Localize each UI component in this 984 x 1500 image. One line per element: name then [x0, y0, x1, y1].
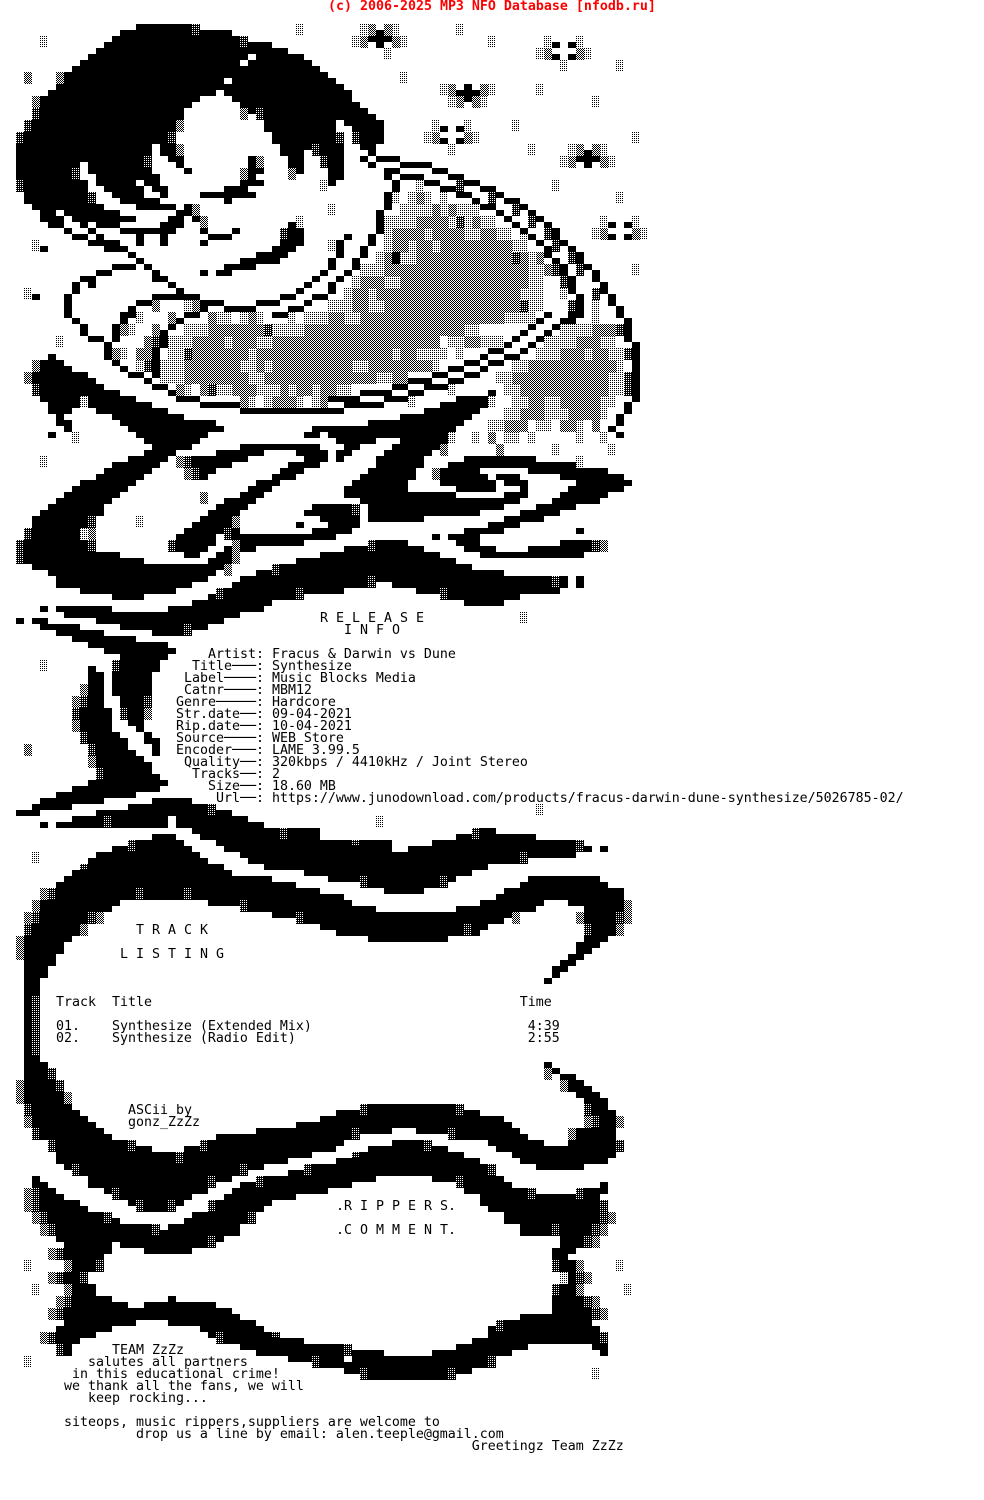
heading: rippers comment: .R I P P E R S. .C O M M E N T. — [336, 1199, 456, 1238]
release info table: Artist: Fracus & Darwin vs Dune Title───: Synthesize Label────: Music Blocks Media Catnr────: MBM12 Genre─────: Hardcore Str.date──: 09-04-2021 Rip.date──: 10-04-2021 Source────: WEB Store Encoder───: LAME 3.99.5 Quality──: 320kbps / 4410kHz / Joint Stereo Tracks──: 2 Size──: 18.60 MB Url──: https://www.junodownload.com/products/fracus-darwin-dune-synthesize/5026785-02/ — [176, 647, 904, 806]
ascii art: waves around release info — [0, 636, 656, 1002]
track listing table: Track Title Time 01. Synthesize (Extended Mix) 4:39 02. Synthesize (Radio Edit) 2:55 — [56, 995, 560, 1046]
heading: track listing: T R A C K L I S T I N G — [120, 923, 224, 962]
ascii art: anime figure, hair and disc — [0, 24, 656, 636]
ascii artist credit: ASCii by gonz_ZzZz — [128, 1103, 200, 1130]
icons: stars and scattered specks around the disc — [352, 24, 647, 275]
ascii art: waves around track listing and rippers comment — [0, 996, 656, 1380]
team message: TEAM ZzZz salutes all partners in this educational crime! we thank all the fans, we will keep rocking... siteops, music rippers,suppliers are welcome to drop us a line by email: alen.teeple@gmail.com Greetingz Team ZzZz — [64, 1343, 624, 1454]
ascii art illustration — [16, 24, 647, 1380]
heading: release info: R E L E A S E I N F O — [320, 611, 424, 638]
